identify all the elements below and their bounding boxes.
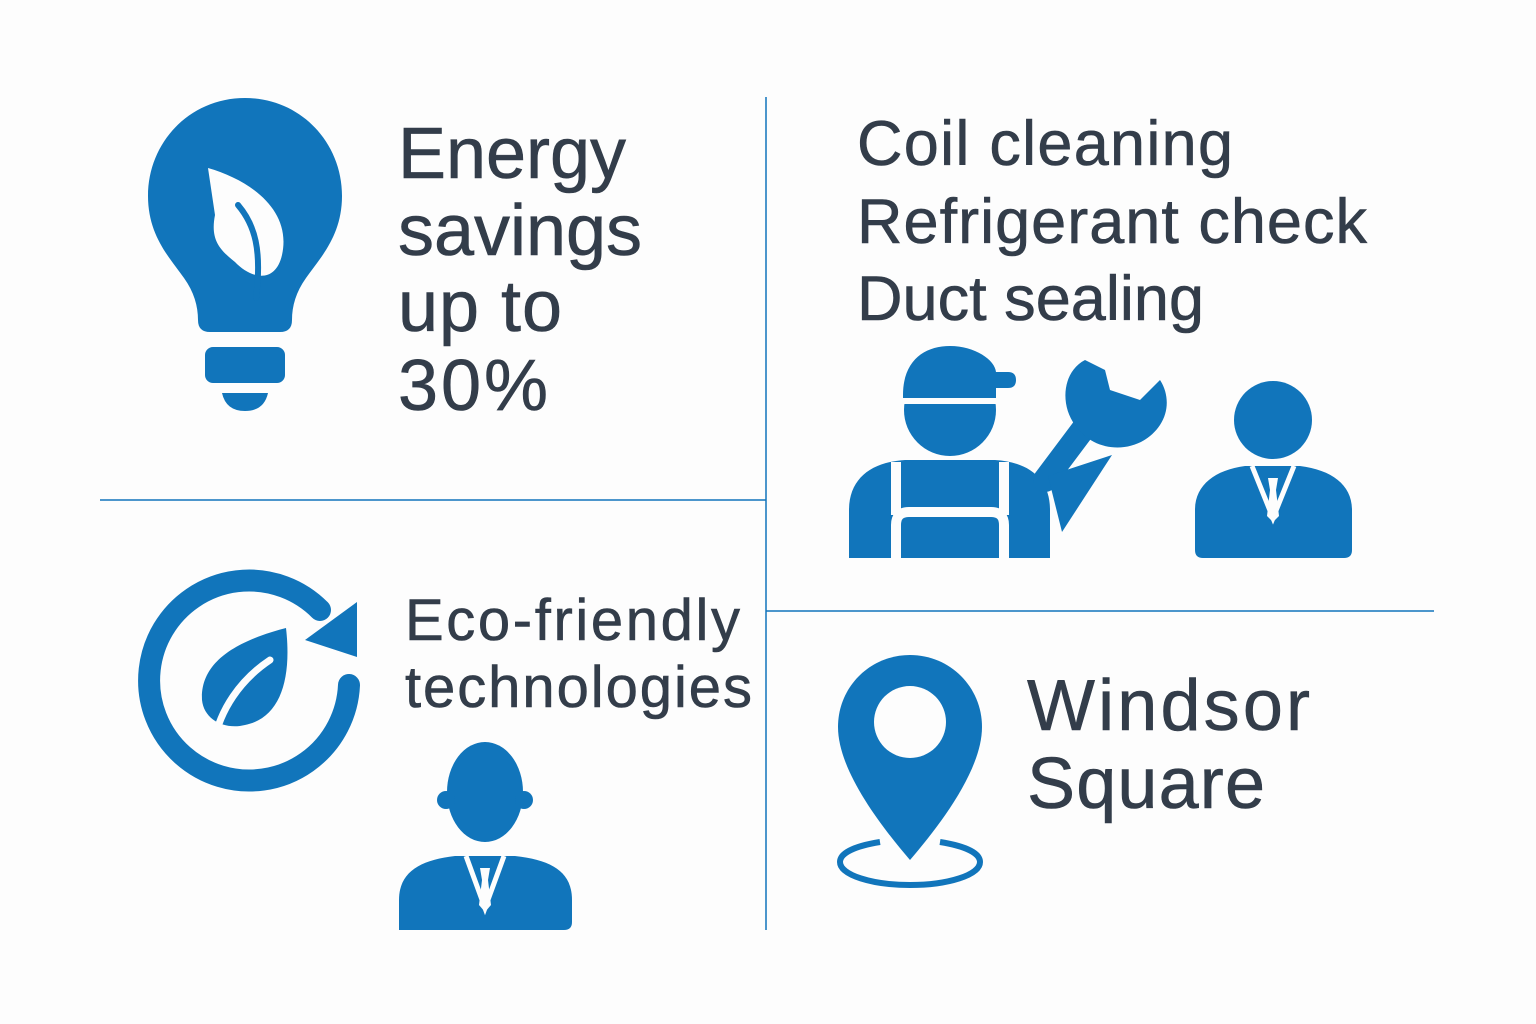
text: eco-friendly: Eco-friendly	[405, 588, 740, 653]
text: energy savings: up to	[398, 267, 562, 347]
icon: technician with wrench	[849, 346, 1167, 558]
text: location	[1027, 666, 1310, 824]
text: services list: Duct sealing	[857, 264, 1204, 334]
text: energy savings: savings	[398, 191, 642, 271]
icon: light bulb with leaf	[148, 98, 342, 411]
icon: person bottom	[399, 742, 572, 930]
text: location: Square	[1027, 744, 1265, 824]
text: services list	[857, 109, 1368, 334]
text: services list: Refrigerant check	[857, 187, 1368, 257]
text: energy savings: 30%	[398, 346, 548, 426]
text: services list: Coil cleaning	[857, 109, 1233, 179]
text: eco-friendly	[405, 588, 752, 720]
text: energy savings: Energy	[398, 114, 626, 194]
text: eco-friendly: technologies	[405, 655, 752, 720]
text: energy savings	[398, 114, 642, 426]
icon: person top right	[1195, 381, 1352, 558]
icon: location pin	[838, 655, 982, 885]
icon: recycle with leaf	[149, 581, 357, 781]
text: location: Windsor	[1027, 666, 1310, 746]
